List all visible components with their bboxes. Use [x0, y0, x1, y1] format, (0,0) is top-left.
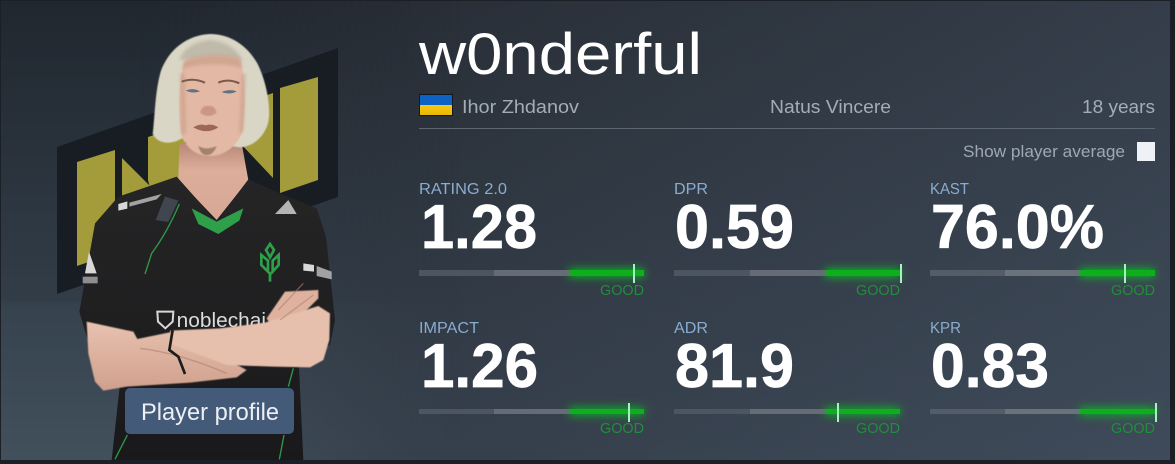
toggle: show player average: Show player average: [963, 143, 1125, 161]
team name: Natus Vincere: [770, 97, 891, 117]
sponsor wordmark: noblechai: [177, 309, 266, 332]
stat: ADR: 81.9: [675, 332, 794, 401]
arm creases: [140, 283, 313, 373]
mouth: [193, 125, 218, 131]
stat: KAST: GOOD: [1111, 282, 1155, 299]
stat: ADR: GOOD: [856, 420, 900, 437]
DPR bar: [674, 264, 902, 283]
stat: KAST: 76.0%: [931, 193, 1104, 262]
stat: KPR: KPR: [930, 320, 961, 337]
stat: rating 2.0: RATING 2.0: [419, 181, 507, 198]
stat: impact: GOOD: [600, 420, 644, 437]
jersey piping: [115, 204, 293, 459]
player photo illustration: [79, 34, 335, 460]
icon: Ukraine flag: [419, 94, 453, 116]
stat: rating 2.0: GOOD: [600, 282, 644, 299]
hair shade: [179, 40, 243, 60]
stat: KAST: KAST: [930, 181, 969, 198]
stat: KPR: [930, 320, 1157, 437]
KAST bar: [930, 264, 1155, 283]
stat: ADR: ADR: [674, 320, 708, 337]
stat: impact: [419, 320, 644, 437]
nose: [200, 106, 217, 116]
stat: DPR: [674, 181, 902, 299]
ADR bar: [674, 403, 900, 422]
stat: impact: IMPACT: [419, 320, 479, 337]
temple shadows: [180, 55, 246, 135]
hair back: [153, 34, 269, 147]
stat: rating 2.0: 1.28: [421, 193, 537, 262]
stat: DPR: DPR: [674, 181, 708, 198]
stat: rating 2.0: [419, 181, 644, 299]
KPR bar: [930, 403, 1157, 422]
player info row: [419, 94, 1155, 117]
sponsor shield: [157, 312, 173, 328]
player real name: Ihor Zhdanov: [462, 97, 579, 117]
button: player profile: [125, 388, 294, 434]
shoulder patch: [156, 197, 178, 222]
sponsor marks: [83, 194, 332, 283]
goatee: [198, 146, 217, 155]
eyes: [186, 89, 237, 94]
button: player profile: Player profile: [141, 399, 279, 426]
stat: ADR: [674, 320, 900, 437]
age: 18 years: [1082, 97, 1155, 117]
left arm: [87, 322, 247, 391]
stat: DPR: 0.59: [675, 193, 794, 262]
eyebrows: [182, 80, 239, 83]
stat: KAST: [930, 181, 1155, 299]
stat: impact: 1.26: [421, 332, 538, 401]
team logo: Natus Vincere: [57, 48, 338, 294]
right arm: [170, 306, 330, 367]
face: [179, 55, 245, 156]
title: player nickname: w0nderful: [418, 22, 702, 87]
hand and fingers: [267, 290, 318, 330]
team badge: [261, 244, 279, 282]
bracelet: [169, 330, 185, 374]
jersey: [79, 177, 335, 460]
stat: DPR: GOOD: [856, 282, 900, 299]
rating bar: [419, 264, 644, 283]
impact bar: [419, 403, 644, 422]
stat: KPR: 0.83: [931, 332, 1049, 401]
collar: green: [192, 208, 243, 234]
neck: [178, 143, 248, 220]
stat: KPR: GOOD: [1111, 420, 1155, 437]
